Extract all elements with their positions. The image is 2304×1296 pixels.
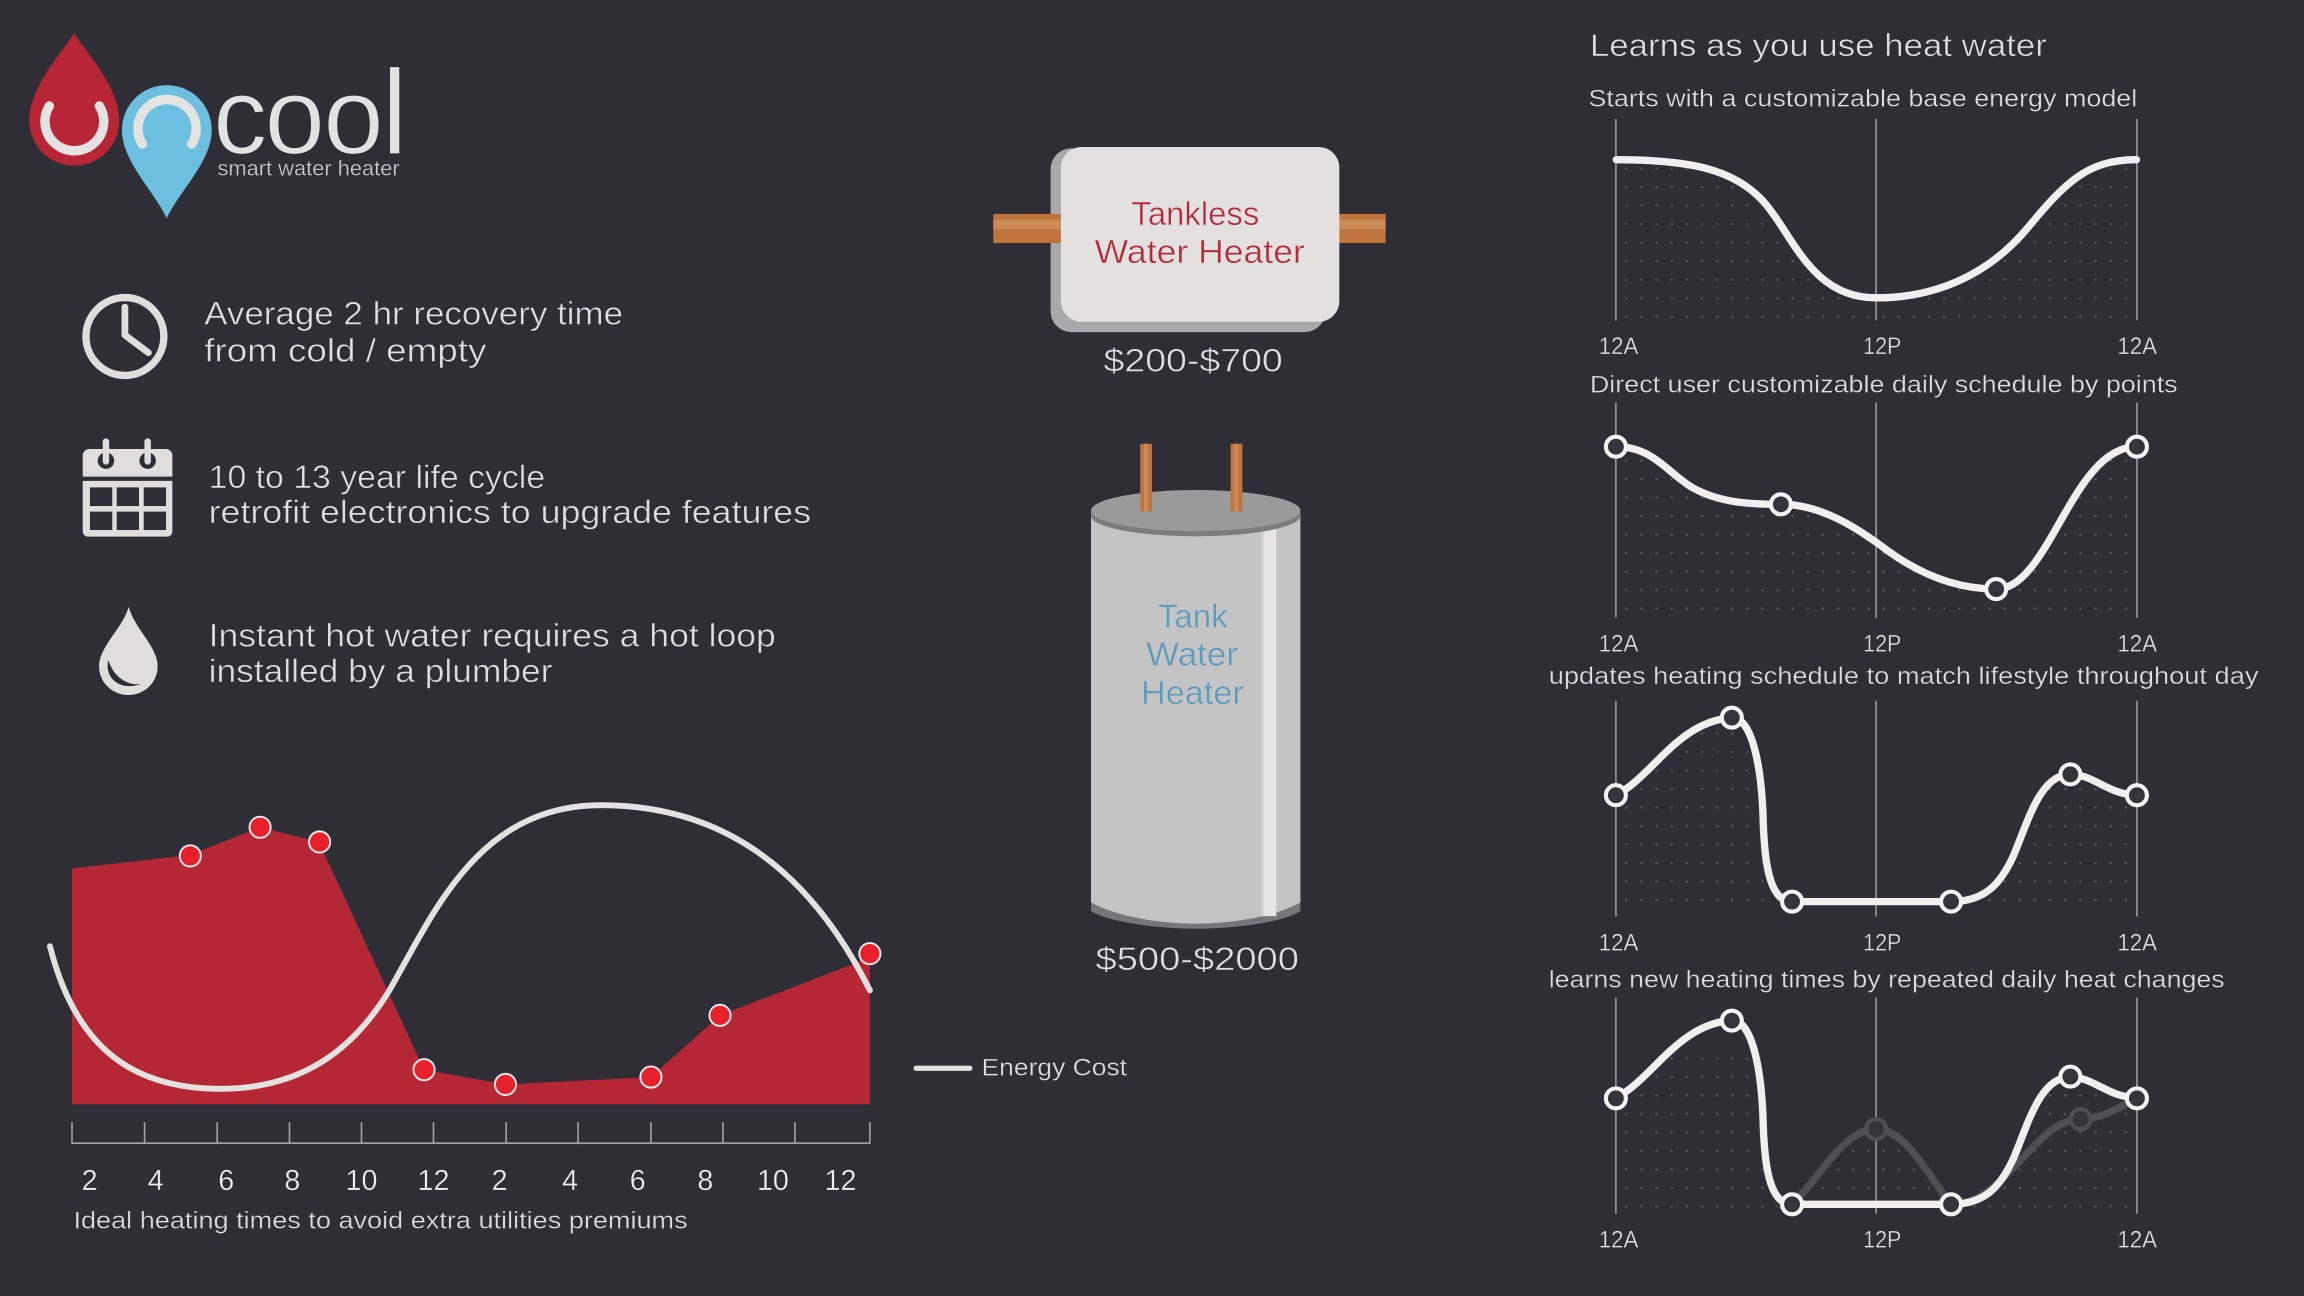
text: hot water bbox=[209, 618, 776, 689]
time labels bbox=[1599, 333, 2158, 360]
caption: updates heating schedule to match lifestyle throughout day bbox=[1549, 663, 2259, 690]
heater label: Water Heater bbox=[1095, 234, 1305, 271]
feature: recovery time bbox=[86, 296, 623, 375]
tank price: $500-$2000 bbox=[1096, 941, 1299, 977]
text: recovery time: from cold / empty bbox=[204, 332, 487, 368]
heater body: front bbox=[1061, 147, 1339, 322]
curve bbox=[1616, 160, 2136, 298]
caption: Starts with a customizable base energy model bbox=[1588, 86, 2137, 113]
icon: water drop bbox=[99, 607, 158, 695]
icon: red drop bbox=[29, 33, 119, 166]
control points bbox=[1606, 437, 2147, 599]
heater body: shadow bbox=[1051, 148, 1325, 332]
guide lines bbox=[1616, 119, 2137, 320]
time labels: 12P bbox=[1863, 930, 1901, 957]
time labels bbox=[1599, 1227, 2158, 1254]
pipe: right bbox=[1339, 214, 1386, 243]
text: hot water: installed by a plumber bbox=[209, 653, 553, 689]
time labels: 12P bbox=[1863, 1227, 1901, 1254]
logo bbox=[29, 33, 408, 218]
feature: hot water bbox=[99, 607, 776, 695]
heater label: Tankless bbox=[1131, 196, 1259, 233]
data points bbox=[180, 817, 880, 1095]
tank label bbox=[1141, 598, 1244, 712]
icon: white U bbox=[45, 106, 104, 151]
area: hot water demand bbox=[72, 827, 870, 1104]
text: life cycle: retrofit electronics to upgrade features bbox=[209, 494, 811, 530]
icon: calendar bbox=[83, 442, 172, 537]
chart 3: lifestyle schedule bbox=[1549, 663, 2259, 957]
axis labels: 4 bbox=[148, 1165, 164, 1197]
caption: Direct user customizable daily schedule by points bbox=[1590, 371, 2178, 398]
time labels: 12A bbox=[2117, 1227, 2158, 1254]
tank label: Heater bbox=[1141, 675, 1244, 712]
chart: ideal heating times bbox=[50, 805, 880, 1234]
time labels: 12A bbox=[1599, 631, 1639, 658]
icon: blue pin bbox=[122, 85, 212, 218]
pipes bbox=[1140, 444, 1242, 511]
axis labels: 4 bbox=[562, 1165, 578, 1197]
tankless water heater bbox=[993, 147, 1386, 379]
logo wordmark: l bbox=[381, 45, 408, 180]
axis labels: 6 bbox=[630, 1165, 646, 1197]
chart 1: base energy model bbox=[1588, 86, 2158, 360]
tank body bbox=[1091, 513, 1300, 924]
control points bbox=[1606, 1011, 2147, 1214]
tank water heater bbox=[1091, 444, 1300, 977]
logo tagline: smart water heater bbox=[217, 157, 400, 181]
axis labels: 10 bbox=[346, 1165, 377, 1197]
caption: learns new heating times by repeated daily heat changes bbox=[1549, 966, 2225, 993]
dotted area bbox=[1616, 1054, 2136, 1214]
text: life cycle bbox=[209, 459, 811, 530]
text: life cycle: 10 to 13 year life cycle bbox=[209, 459, 545, 495]
learned curve (grey) bbox=[1792, 1098, 2136, 1204]
axis labels: 12 bbox=[418, 1165, 449, 1197]
control points bbox=[1606, 708, 2147, 912]
time labels: 12A bbox=[2117, 333, 2158, 360]
tank highlight bbox=[1261, 522, 1276, 916]
icon: white n bbox=[138, 100, 196, 144]
curve bbox=[1616, 718, 2136, 902]
time labels: 12A bbox=[1599, 333, 1639, 360]
axis labels bbox=[82, 1165, 856, 1197]
chart caption: Ideal heating times to avoid extra utilities premiums bbox=[73, 1207, 688, 1234]
chart 4: learned heating times bbox=[1549, 966, 2225, 1254]
axis labels: 8 bbox=[284, 1165, 300, 1197]
axis labels: 8 bbox=[697, 1165, 713, 1197]
guide lines bbox=[1616, 998, 2137, 1214]
text: hot water: Instant hot water requires a hot loop bbox=[209, 618, 776, 654]
time labels: 12A bbox=[1599, 930, 1639, 957]
grey points bbox=[1866, 1109, 2091, 1139]
time labels: 12A bbox=[2117, 930, 2158, 957]
feature: life cycle bbox=[83, 442, 811, 537]
time labels: 12A bbox=[2117, 631, 2158, 658]
icon: clock bbox=[86, 298, 164, 375]
curve bbox=[1616, 1020, 2136, 1204]
tank lid bbox=[1091, 490, 1300, 531]
text: recovery time: Average 2 hr recovery time bbox=[204, 296, 623, 332]
axis labels: 2 bbox=[492, 1165, 508, 1197]
tank label: Water bbox=[1146, 637, 1238, 674]
logo wordmark: coo bbox=[213, 57, 384, 178]
time labels bbox=[1599, 930, 2158, 957]
time labels: 12A bbox=[1599, 1227, 1639, 1254]
panel heading: learns: Learns as you use heat water bbox=[1590, 27, 2047, 63]
heater label bbox=[1095, 196, 1305, 271]
axis labels: 2 bbox=[82, 1165, 98, 1197]
axis labels: 10 bbox=[757, 1165, 789, 1197]
curve bbox=[1616, 447, 2137, 589]
dotted area bbox=[1616, 718, 2136, 911]
time axis bbox=[72, 1122, 870, 1144]
dotted area bbox=[1616, 447, 2137, 618]
time labels: 12P bbox=[1863, 631, 1901, 658]
heater price: $200-$700 bbox=[1104, 343, 1283, 379]
legend: energy cost: Energy Cost bbox=[982, 1055, 1127, 1082]
tank lid rim bbox=[1091, 495, 1300, 536]
time labels: 12P bbox=[1863, 333, 1901, 360]
axis labels: 12 bbox=[825, 1165, 856, 1197]
dotted area bbox=[1616, 160, 2136, 320]
line: energy cost curve bbox=[50, 805, 870, 1089]
guide lines bbox=[1616, 701, 2137, 917]
text: recovery time bbox=[204, 296, 623, 368]
chart 2: customizable points bbox=[1590, 371, 2178, 658]
tank bottom rim bbox=[1091, 899, 1300, 929]
axis labels: 6 bbox=[218, 1165, 234, 1197]
time labels bbox=[1599, 631, 2158, 658]
guide lines bbox=[1616, 403, 2137, 618]
tank label: Tank bbox=[1158, 598, 1228, 635]
pipe: left bbox=[993, 214, 1062, 243]
